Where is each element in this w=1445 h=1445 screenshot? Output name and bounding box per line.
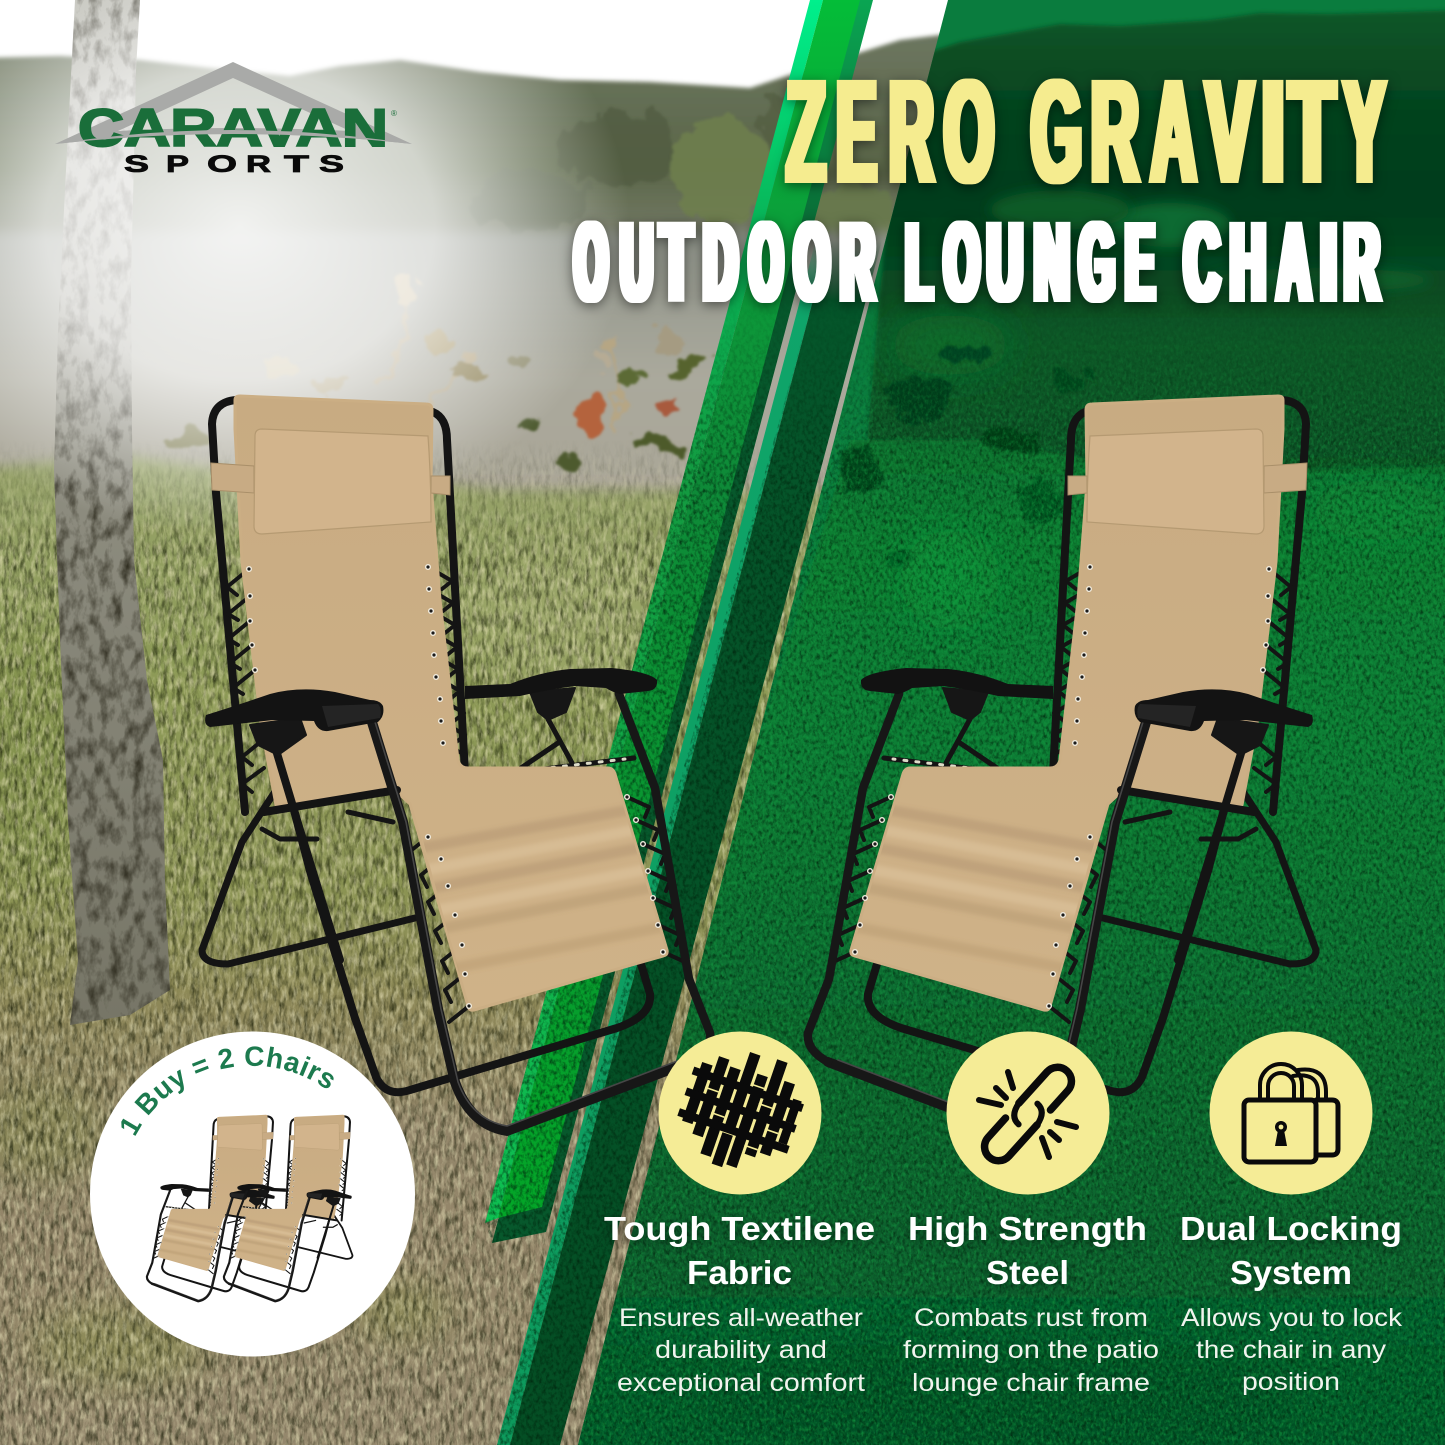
heading: Steel — [986, 1254, 1069, 1291]
green tinted right half of the photo — [540, 0, 1445, 1445]
description: exceptional comfort — [617, 1369, 865, 1397]
logo: Caravan Sports: P — [166, 151, 189, 178]
icon: double padlock — [1210, 1032, 1372, 1194]
headrest strap — [211, 463, 450, 495]
feature: dual locking system — [1180, 1032, 1403, 1396]
heading: System — [1230, 1254, 1352, 1291]
logo: Caravan Sports: S — [319, 151, 344, 178]
logo: Caravan Sports: T — [284, 151, 310, 178]
description: durability and — [655, 1336, 827, 1364]
logo: Caravan Sports: O — [207, 151, 237, 178]
title: Outdoor Lounge Chair: U — [987, 201, 1022, 324]
title: Zero Gravity: R — [889, 51, 934, 212]
title: Zero Gravity: Z — [787, 51, 825, 212]
logo: Caravan Sports: S — [124, 151, 149, 178]
title: Outdoor Lounge Chair: O — [750, 201, 782, 324]
title: Zero Gravity: I — [1261, 51, 1285, 212]
title: Outdoor Lounge Chair: H — [1230, 201, 1265, 324]
diagonal green stripes — [480, 0, 900, 1445]
heading: Dual Locking — [1180, 1210, 1402, 1247]
title: Outdoor Lounge Chair: N — [1034, 201, 1069, 324]
title: Outdoor Lounge Chair: O — [944, 201, 979, 324]
title: Outdoor Lounge Chair: G — [1079, 201, 1114, 324]
title: Outdoor Lounge Chair: T — [660, 201, 692, 324]
title: Outdoor Lounge Chair: D — [704, 201, 738, 324]
feature: high strength steel — [903, 1032, 1159, 1397]
logo: Caravan Sports — [55, 62, 412, 178]
description: Combats rust from — [914, 1304, 1148, 1332]
chair: left, tan zero gravity lounger — [202, 396, 710, 1131]
title: Zero Gravity: T — [1289, 51, 1335, 212]
title: Zero Gravity: R — [1091, 51, 1139, 212]
title: Outdoor Lounge Chair: U — [621, 201, 652, 324]
mini chair pair — [147, 1115, 352, 1301]
near armrest — [205, 689, 383, 731]
heading: High Strength — [908, 1210, 1147, 1247]
description: forming on the patio — [903, 1336, 1159, 1364]
text: Y — [1344, 51, 1385, 212]
title: Outdoor Lounge Chair: A — [1278, 201, 1310, 324]
description: the chair in any — [1196, 1336, 1387, 1364]
distant flowers and shrubs — [165, 276, 714, 472]
far armrest — [465, 668, 657, 699]
description: lounge chair frame — [912, 1369, 1150, 1397]
title: Zero Gravity: O — [944, 51, 994, 212]
title: Zero Gravity: V — [1206, 51, 1253, 212]
tree trunk — [54, 0, 170, 1025]
text: R — [1344, 201, 1379, 324]
feature: tough textilene fabric — [604, 1032, 875, 1397]
icon: woven fabric — [658, 1032, 822, 1194]
description: Allows you to lock — [1181, 1304, 1403, 1332]
title: Outdoor Lounge Chair: I — [1320, 201, 1336, 324]
chair: right, mirrored lounger — [808, 396, 1316, 1131]
description: position — [1242, 1368, 1340, 1396]
description: Ensures all-weather — [619, 1304, 863, 1332]
heading: Tough Textilene — [604, 1210, 875, 1247]
badge: 1 Buy = 2 Chairs: 1 Buy = 2 Chairs — [121, 1046, 334, 1136]
title: Outdoor Lounge Chair: E — [1126, 201, 1154, 324]
logo: Caravan Sports: R — [246, 151, 271, 178]
logo: Caravan Sports: CARAVAN — [78, 99, 388, 158]
title: Zero Gravity: E — [837, 51, 876, 212]
title: Outdoor Lounge Chair: O — [574, 201, 608, 324]
arm brackets — [250, 688, 575, 755]
title: Outdoor Lounge Chair: C — [1184, 201, 1219, 324]
backrest and seat fabric — [235, 396, 667, 1010]
pillow — [254, 429, 431, 534]
badge: 1 Buy = 2 Chairs — [90, 1032, 415, 1356]
fog — [0, 0, 750, 640]
title: Zero Gravity: A — [1151, 51, 1196, 212]
background photo: misty lake and meadow — [0, 0, 940, 1445]
title: Outdoor Lounge Chair: O — [794, 201, 829, 324]
title: Zero Gravity: G — [1031, 51, 1082, 212]
heading: Fabric — [687, 1254, 792, 1291]
logo: Caravan Sports: ® — [391, 109, 397, 118]
title: Outdoor Lounge Chair: L — [906, 201, 932, 324]
icon: breaking chain link — [946, 1032, 1110, 1194]
title: Outdoor Lounge Chair: R — [840, 201, 874, 324]
